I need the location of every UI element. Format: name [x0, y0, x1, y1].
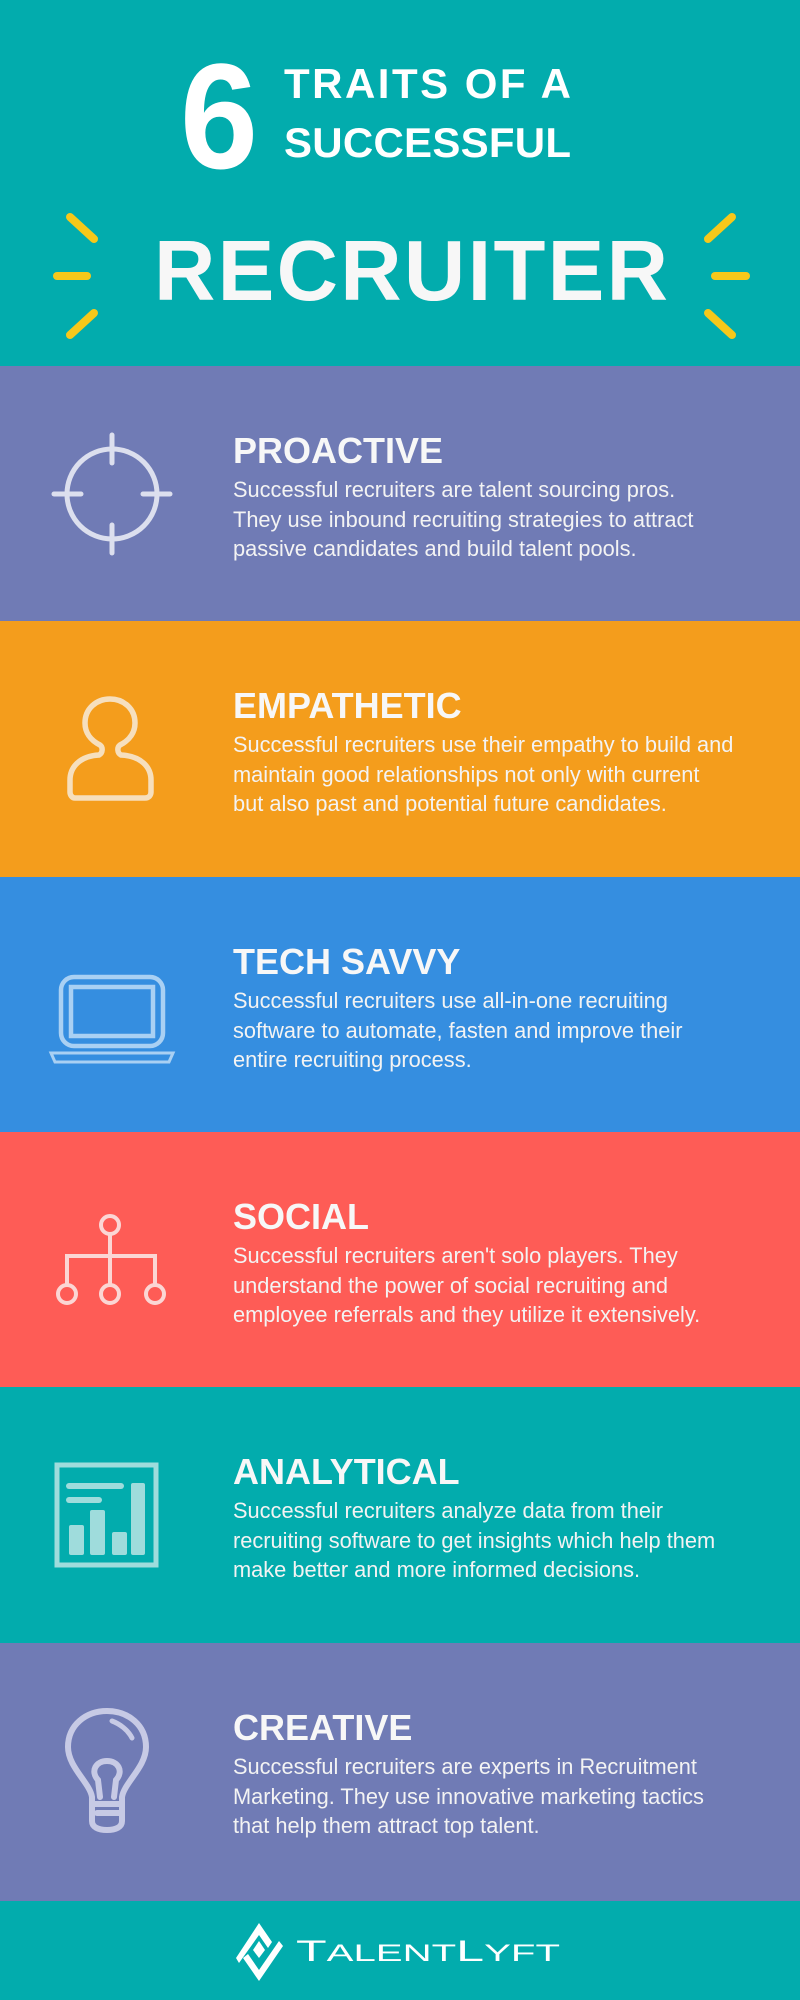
text: software to automate, fasten and improve their [233, 1018, 682, 1042]
text: Successful recruiters are experts in Recruitment [233, 1754, 697, 1779]
text [233, 1754, 704, 1838]
title line: traits of a: TRAITS OF A [284, 60, 571, 107]
text: Successful recruiters use all-in-one recruiting [233, 988, 668, 1013]
icon: logo diamond [236, 1923, 283, 1981]
heading: PROACTIVE [233, 430, 443, 471]
text: entire recruiting process. [233, 1047, 472, 1072]
heading: RECRUITER: RECRUITER [154, 224, 668, 319]
text [233, 1498, 715, 1582]
text [233, 477, 694, 561]
text: understand the power of social recruiting and [233, 1272, 668, 1298]
heading: SOCIAL [233, 1196, 369, 1237]
heading: EMPATHETIC [233, 685, 462, 726]
text: Successful recruiters analyze data from their [233, 1498, 663, 1523]
logo text: T ALENT L YFT [296, 1935, 561, 1968]
text [233, 988, 682, 1072]
text [233, 1243, 700, 1327]
icon: laptop [48, 974, 176, 1064]
heading: CREATIVE [233, 1707, 412, 1748]
panel: creative [0, 1643, 800, 1901]
title number 6: 6 [180, 32, 258, 200]
panel: social [0, 1132, 800, 1387]
text: Successful recruiters aren't solo players. They [233, 1243, 678, 1268]
icon: crosshair [52, 432, 172, 556]
text: maintain good relationships not only with current [233, 762, 699, 786]
icon: network [56, 1214, 166, 1305]
panel: empathetic [0, 621, 800, 877]
panel: proactive [0, 366, 800, 621]
icon: light bulb [65, 1708, 149, 1833]
icon: person [67, 696, 154, 801]
heading: TECH SAVVY [233, 941, 460, 982]
panel: analytical [0, 1387, 800, 1643]
text [233, 732, 733, 816]
text: employee referrals and they utilize it extensively. [233, 1302, 700, 1327]
text: that help them attract top talent. [233, 1813, 540, 1838]
heading: ANALYTICAL [233, 1451, 460, 1492]
header [0, 0, 800, 366]
footer: TalentLyft logo [0, 1901, 800, 2000]
text: make better and more informed decisions. [233, 1557, 640, 1582]
text: recruiting software to get insights which help them [233, 1528, 715, 1552]
panel: tech savvy [0, 877, 800, 1132]
text: but also past and potential future candidates. [233, 791, 667, 816]
title line: successful: SUCCESSFUL [284, 119, 571, 166]
text: passive candidates and build talent pools. [233, 536, 637, 561]
text: Successful recruiters use their empathy to build and [233, 732, 733, 757]
text: They use inbound recruiting strategies to attract [233, 506, 693, 532]
icon: chart [54, 1462, 158, 1568]
text: Marketing. They use innovative marketing tactics [233, 1784, 704, 1808]
text: Successful recruiters are talent sourcing pros. [233, 477, 675, 502]
